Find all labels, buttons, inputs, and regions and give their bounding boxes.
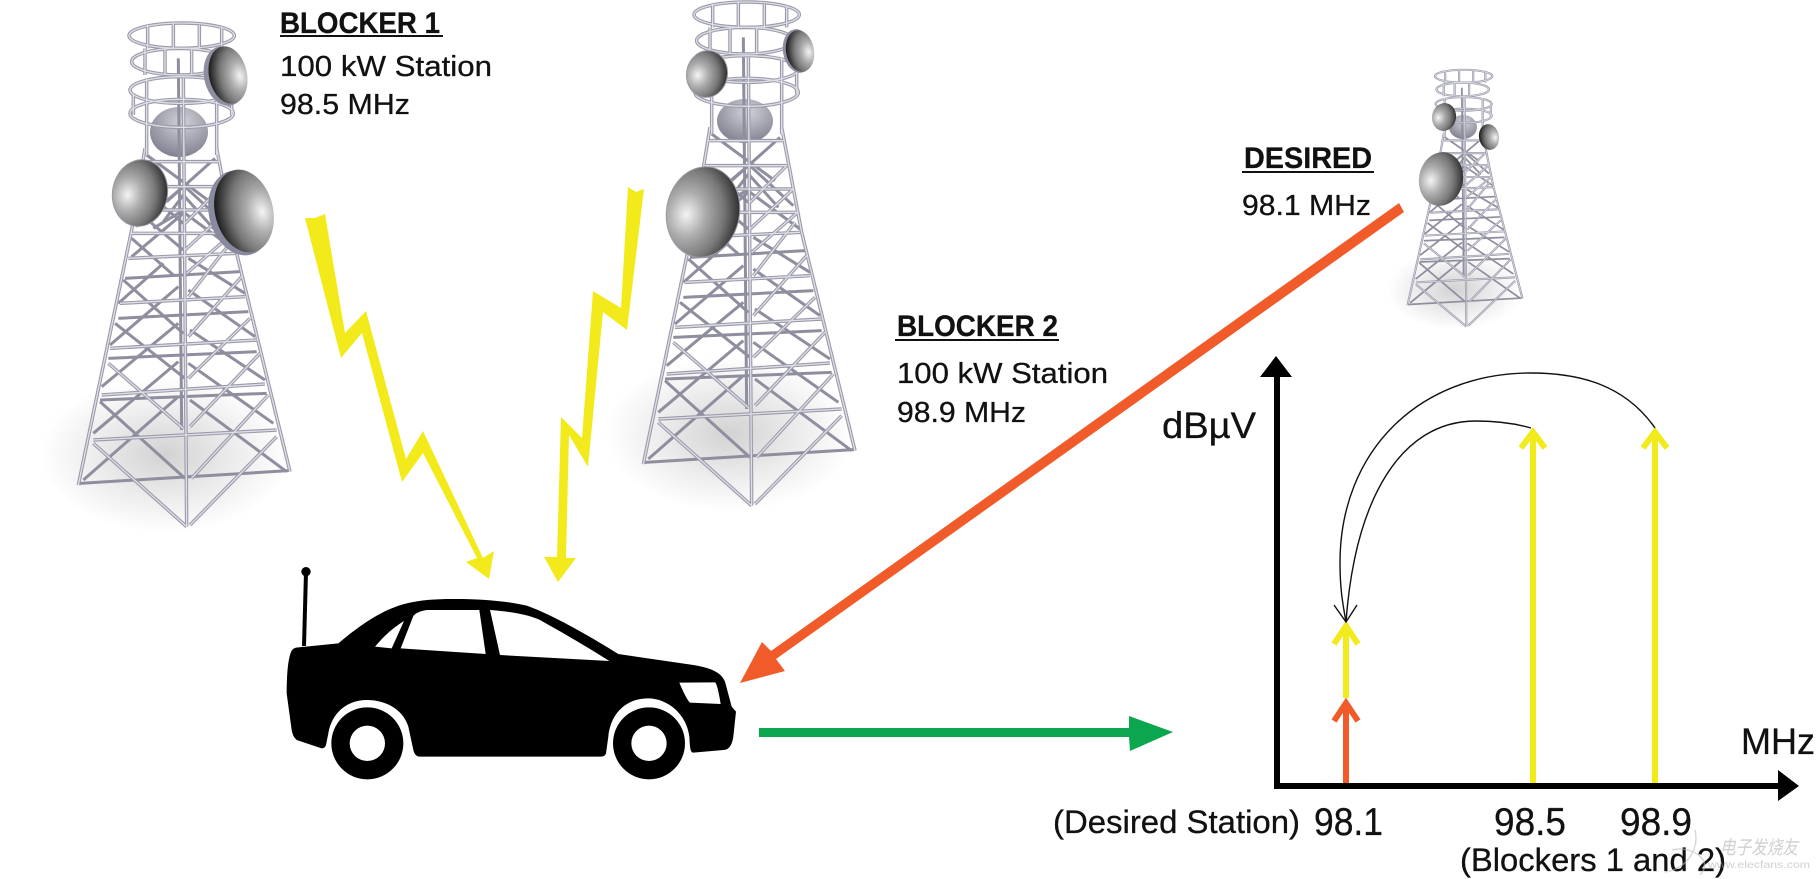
arrow: yellow lightning from blocker 1 [305,214,494,579]
arrow: green output to spectrum [759,716,1173,751]
watermark [1665,830,1810,875]
watermark: 电子发烧友 [1720,837,1800,859]
label: blocker 2: 100 kW Station [897,358,1108,390]
tick 98.1: 98.1 [1314,801,1383,844]
blocker 2 arrow at 98.9 [1643,432,1667,783]
watermark: www.elecfans.com [1707,860,1810,871]
tick 98.5: 98.5 [1494,801,1566,844]
label: desired station [1242,142,1374,222]
desired signal arrow at 98.1 [1334,703,1358,783]
label: blocker 1: 100 kW Station [280,51,492,83]
tower: desired station [1387,69,1523,330]
y axis label: dBµV [1162,405,1256,446]
arrow: orange signal from desired station [740,203,1404,683]
label: blocker 2: BLOCKER 2 [897,310,1058,343]
tick 98.9: 98.9 [1620,801,1692,844]
x axis [1274,770,1799,801]
chart: received spectrum [1053,356,1815,878]
y axis [1260,356,1292,783]
label: blocker 1: BLOCKER 1 [280,7,440,40]
blockers note: (Blockers 1 and 2) [1460,842,1726,878]
label: desired station: 98.1 MHz [1242,190,1371,222]
intermodulation product arrow at 98.1 [1334,626,1358,698]
label: blocker 2 [895,310,1108,429]
x axis label: MHz [1741,721,1815,762]
icon: car with antenna [287,567,736,779]
arrow: yellow lightning from blocker 2 [544,187,644,582]
label: desired station: DESIRED [1244,142,1372,175]
label: blocker 1: 98.5 MHz [280,89,410,121]
intermodulation curves [1334,373,1655,622]
tower: blocker 2 [605,1,855,512]
desired station note: (Desired Station) [1053,804,1300,840]
label: blocker 1 [280,7,492,121]
label: blocker 2: 98.9 MHz [897,397,1026,429]
tower: blocker 1 [40,22,290,533]
blocker 1 arrow at 98.5 [1521,432,1545,783]
